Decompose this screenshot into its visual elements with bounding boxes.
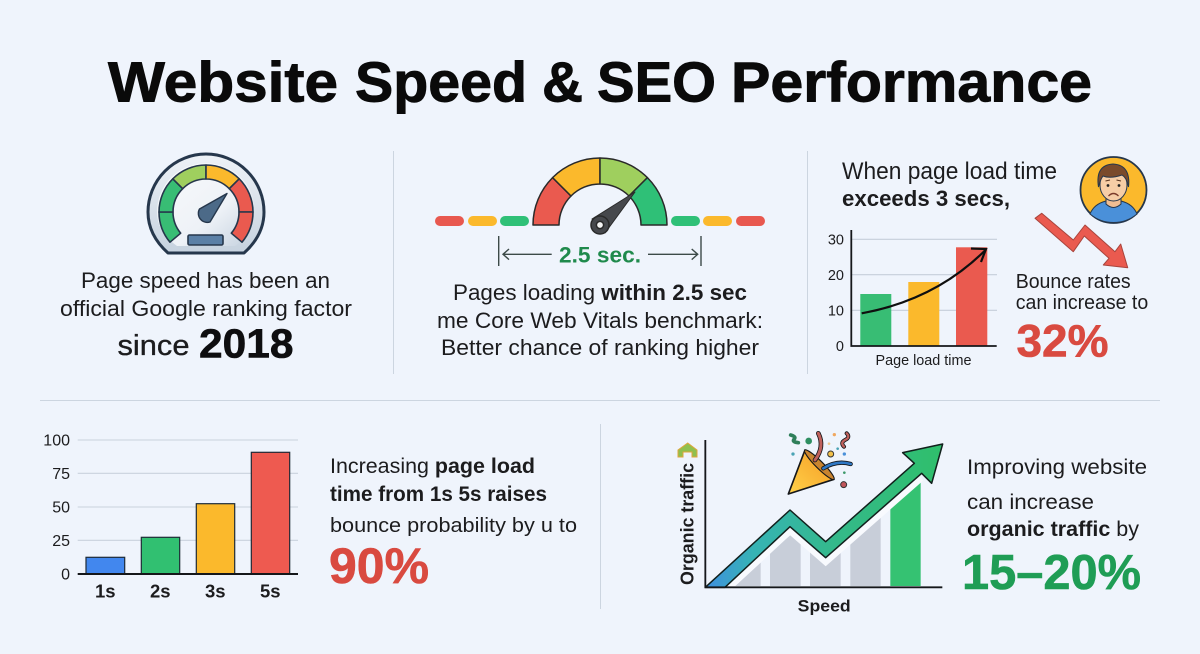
icon: speedometer [148,154,264,253]
heading: load time [842,158,1057,211]
heading: load time: When page load time [842,158,1057,185]
scale dashes [435,216,765,226]
bar chart: bounce probability by load time: 3s [205,580,226,601]
title: & [542,50,583,114]
title [108,50,1092,114]
panel: bounce rate [828,157,1148,369]
arrow: falling zigzag [1035,213,1128,268]
label: 2.5 sec: 2.5 sec. [559,242,641,268]
text: improving website: Improving website [967,455,1147,479]
bar chart: bounce by page load time: 30 [828,232,844,248]
bar chart: bounce probability by load time [43,432,298,601]
bar chart: bounce probability by load time: 50 [52,500,70,516]
chart: speed versus organic traffic [705,440,943,587]
bar chart: bounce probability by load time: 2s [150,580,171,601]
text: improving website: can increase [967,490,1094,514]
text: improving website [967,455,1147,541]
text: load time raises bounce: bounce probability by u to [330,515,577,537]
title: Speed [355,50,527,114]
text: load time raises bounce: time from 1s 5s raises [330,483,547,506]
icon: semicircle gauge [533,158,667,234]
title: Website [108,50,338,114]
icon: party popper [788,433,851,494]
bar chart: bounce probability by load time: 25 [52,533,70,550]
text: benchmark: Better chance of ranking higher [441,335,759,360]
bar chart: bounce probability by load time: 100 [43,432,70,450]
text: bounce rates: Bounce rates [1016,270,1131,293]
title: SEO [597,50,716,114]
bar chart: bounce probability by load time: 5s [260,580,281,601]
text: ranking factor: Page speed has been an [81,268,330,293]
text: bounce rates [1016,270,1148,314]
bar chart: bounce probability by load time: 1s [95,580,116,601]
text: benchmark [437,280,763,360]
panel: ranking factor [60,154,352,366]
text: load time raises bounce: Increasing page load [330,455,535,478]
stat: 90%: 90% [329,538,429,594]
title: Performance [731,50,1092,114]
stat: 15-20%: 15–20% [962,546,1141,600]
icon: small up arrow [678,443,697,457]
panel: organic traffic [678,433,1147,616]
axis label: speed: Speed [798,597,851,616]
text: improving website: organic traffic by [967,517,1139,541]
text: ranking factor [60,268,352,366]
stat: 32%: 32% [1016,316,1108,367]
text: ranking factor: official Google ranking factor [60,296,352,321]
text: ranking factor: 2018 [199,320,294,366]
panel: 2.5 second benchmark [435,158,765,360]
heading: load time: exceeds 3 secs, [842,186,1010,211]
text: ranking factor: since [118,330,190,362]
panel: bounce probability [43,432,577,601]
bar chart: bounce by page load time [828,230,997,369]
axis label: organic traffic: Organic traffic [678,463,698,585]
bar chart: bounce probability by load time: 75 [52,466,70,483]
bar chart: bounce probability by load time: 0 [61,566,70,584]
text: load time raises bounce [330,455,577,537]
text: bounce rates: can increase to [1016,291,1148,314]
text: benchmark: Pages loading within 2.5 sec [453,280,747,305]
bar chart: bounce by page load time: 0 [836,339,844,355]
bracket arrows [499,236,701,266]
bar chart: bounce by page load time: 20 [828,268,844,284]
bar chart: bounce by page load time: Page load time [876,352,972,369]
icon: unhappy user [1080,157,1146,223]
bar chart: bounce by page load time: 10 [828,304,844,320]
text: benchmark: me Core Web Vitals benchmark: [437,308,763,333]
